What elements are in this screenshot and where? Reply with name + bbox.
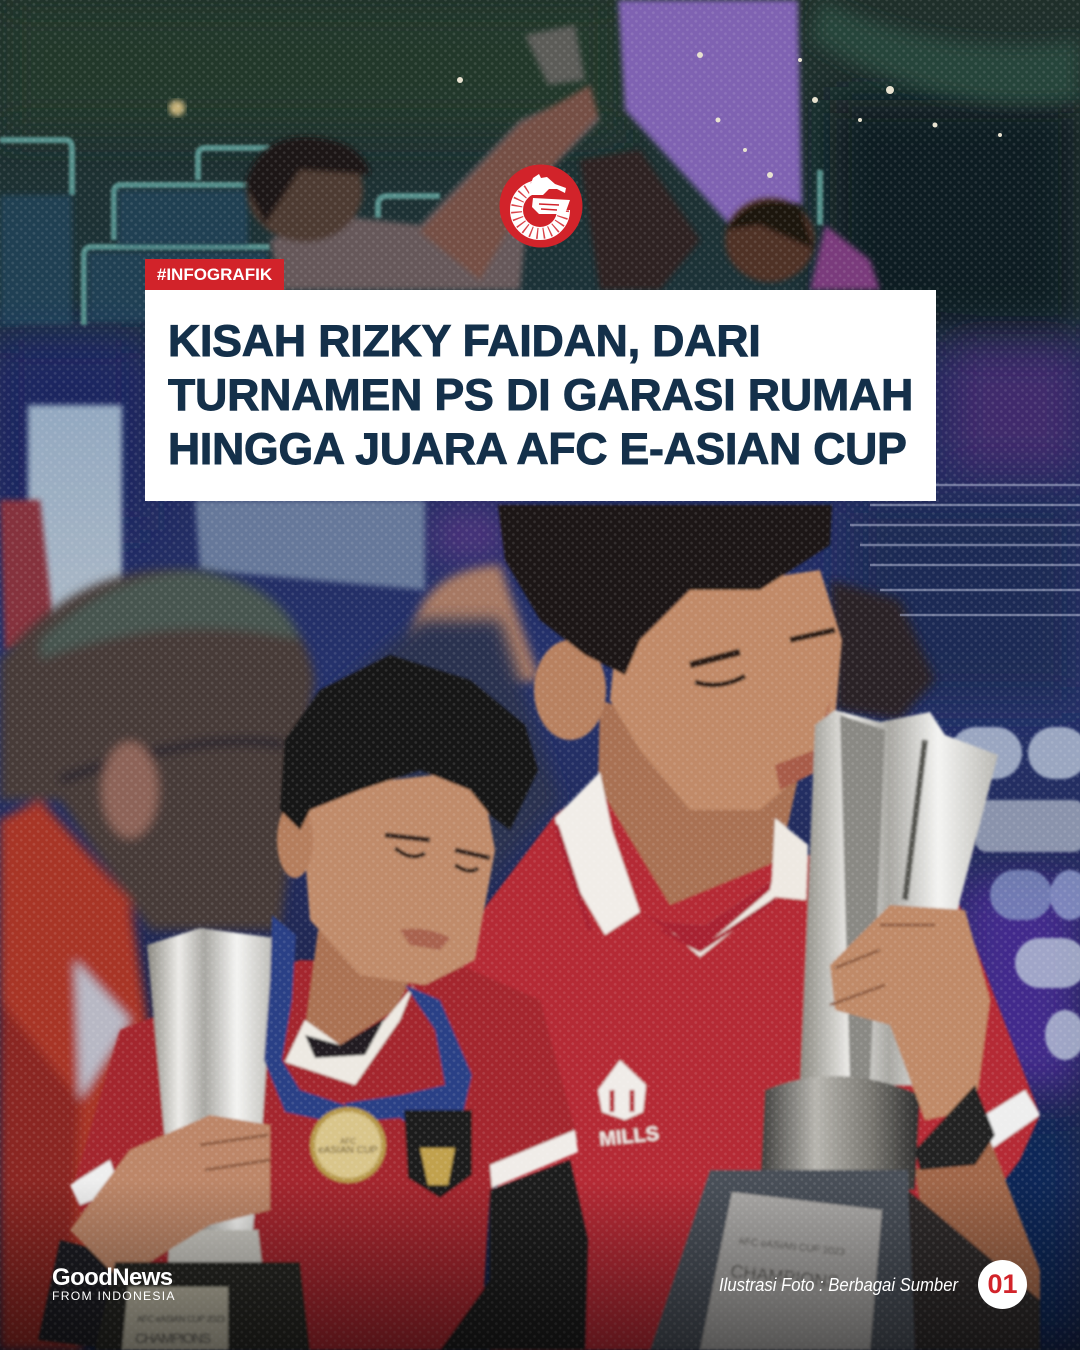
trophy back xyxy=(147,928,275,1260)
title panel: TURNAMEN PS DI GARASI RUMAH xyxy=(168,371,913,420)
plinth xyxy=(650,1170,915,1350)
plinth xyxy=(95,1262,310,1350)
people holding trophy in the background xyxy=(245,25,880,290)
bottom shade xyxy=(0,1180,1080,1350)
hashtag label xyxy=(145,259,284,290)
page number xyxy=(978,1260,1027,1309)
body xyxy=(72,960,578,1350)
hashtag label: #INFOGRAFIK xyxy=(157,265,272,284)
page number: 01 xyxy=(987,1269,1018,1299)
garuda badge xyxy=(404,1110,472,1198)
brand logo GoodNews xyxy=(52,1264,176,1303)
brand logo GoodNews: FROM INDONESIA xyxy=(52,1289,176,1303)
player left: holding trophy with medal xyxy=(38,655,588,1350)
brand logo GoodNews: GoodNews xyxy=(52,1264,173,1291)
title panel: HINGGA JUARA AFC E-ASIAN CUP xyxy=(168,425,907,474)
facial features xyxy=(775,700,830,790)
watch xyxy=(915,1085,995,1170)
forearm xyxy=(915,1140,1040,1350)
collar xyxy=(555,772,640,935)
collar xyxy=(285,985,414,1085)
hand xyxy=(70,1115,270,1280)
dark hair of figure behind right player xyxy=(830,580,935,720)
stadium seats xyxy=(0,140,820,325)
title panel: KISAH RIZKY FAIDAN, DARI xyxy=(168,317,761,366)
photo credit: Ilustrasi Foto : Berbagai Sumber xyxy=(719,1275,958,1295)
medal xyxy=(310,1107,386,1183)
title panel xyxy=(145,290,936,501)
blurred man at left background xyxy=(0,569,315,1350)
jersey xyxy=(445,780,1040,1350)
neck and face xyxy=(598,700,800,905)
player right: kissing trophy xyxy=(445,505,1040,1350)
player left: holding trophy with medal: AFC xyxy=(340,1137,356,1146)
right screen stripes xyxy=(850,485,1080,615)
player right: kissing trophy: CHAMPIONS xyxy=(730,1261,840,1292)
neck xyxy=(305,930,420,1045)
hair xyxy=(498,505,832,675)
face xyxy=(300,770,495,985)
hand on trophy xyxy=(830,905,990,1120)
Mills logo xyxy=(598,1060,646,1120)
player left: holding trophy with medal: CHAMPIONS xyxy=(135,1330,211,1346)
hair xyxy=(280,655,538,830)
purple pillar xyxy=(618,0,802,225)
logo badge xyxy=(500,164,582,248)
confetti xyxy=(169,52,1002,178)
lanyard xyxy=(264,915,345,1125)
player left: holding trophy with medal: eASIAN CUP xyxy=(318,1145,378,1156)
player left: holding trophy with medal: AFC eASIAN CUP 2023 xyxy=(137,1314,225,1324)
Mills text: MILLS xyxy=(598,1123,660,1151)
trophy cup xyxy=(800,710,998,1085)
dark area behind players xyxy=(349,608,558,870)
left blue panel xyxy=(28,405,122,660)
player right: kissing trophy: AFC eASIAN CUP 2023 xyxy=(738,1236,846,1258)
